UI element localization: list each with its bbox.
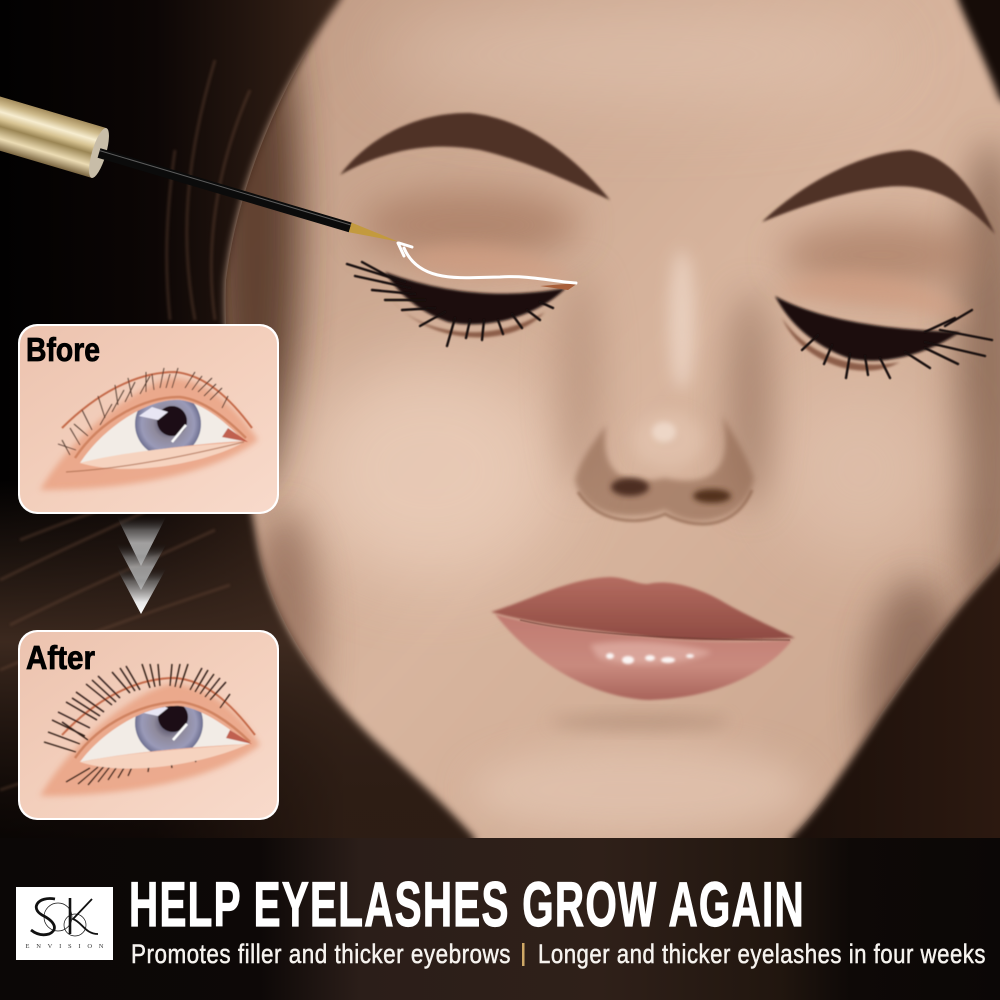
serum applicator (0, 93, 406, 267)
nose (575, 250, 754, 524)
label: before: Bfore (26, 331, 100, 368)
eye socket shadows (360, 189, 980, 320)
swipe arrow (398, 243, 576, 283)
eye: after (40, 664, 260, 796)
logo (16, 887, 113, 960)
portrait: face (210, 0, 1000, 860)
eyebrow: left (340, 113, 610, 200)
bottom banner (0, 838, 1000, 1000)
gold cap (0, 93, 106, 178)
logo wordmark: ENVISION (26, 943, 104, 950)
subline: left: Promotes filler and thicker eyebrows (131, 939, 511, 969)
separator (522, 943, 524, 966)
label: after: After (26, 639, 95, 676)
brush tip (349, 223, 400, 246)
eyebrow: right (762, 150, 995, 234)
eye: before (40, 368, 258, 490)
closed eye: left (347, 262, 578, 346)
closed eye: right (775, 296, 992, 378)
logo monogram (31, 898, 98, 936)
lips (491, 577, 795, 700)
face shading (210, 0, 1000, 835)
panel: before (18, 324, 279, 514)
panel: after (18, 630, 279, 820)
down arrows (116, 515, 167, 614)
black wand (98, 148, 352, 232)
